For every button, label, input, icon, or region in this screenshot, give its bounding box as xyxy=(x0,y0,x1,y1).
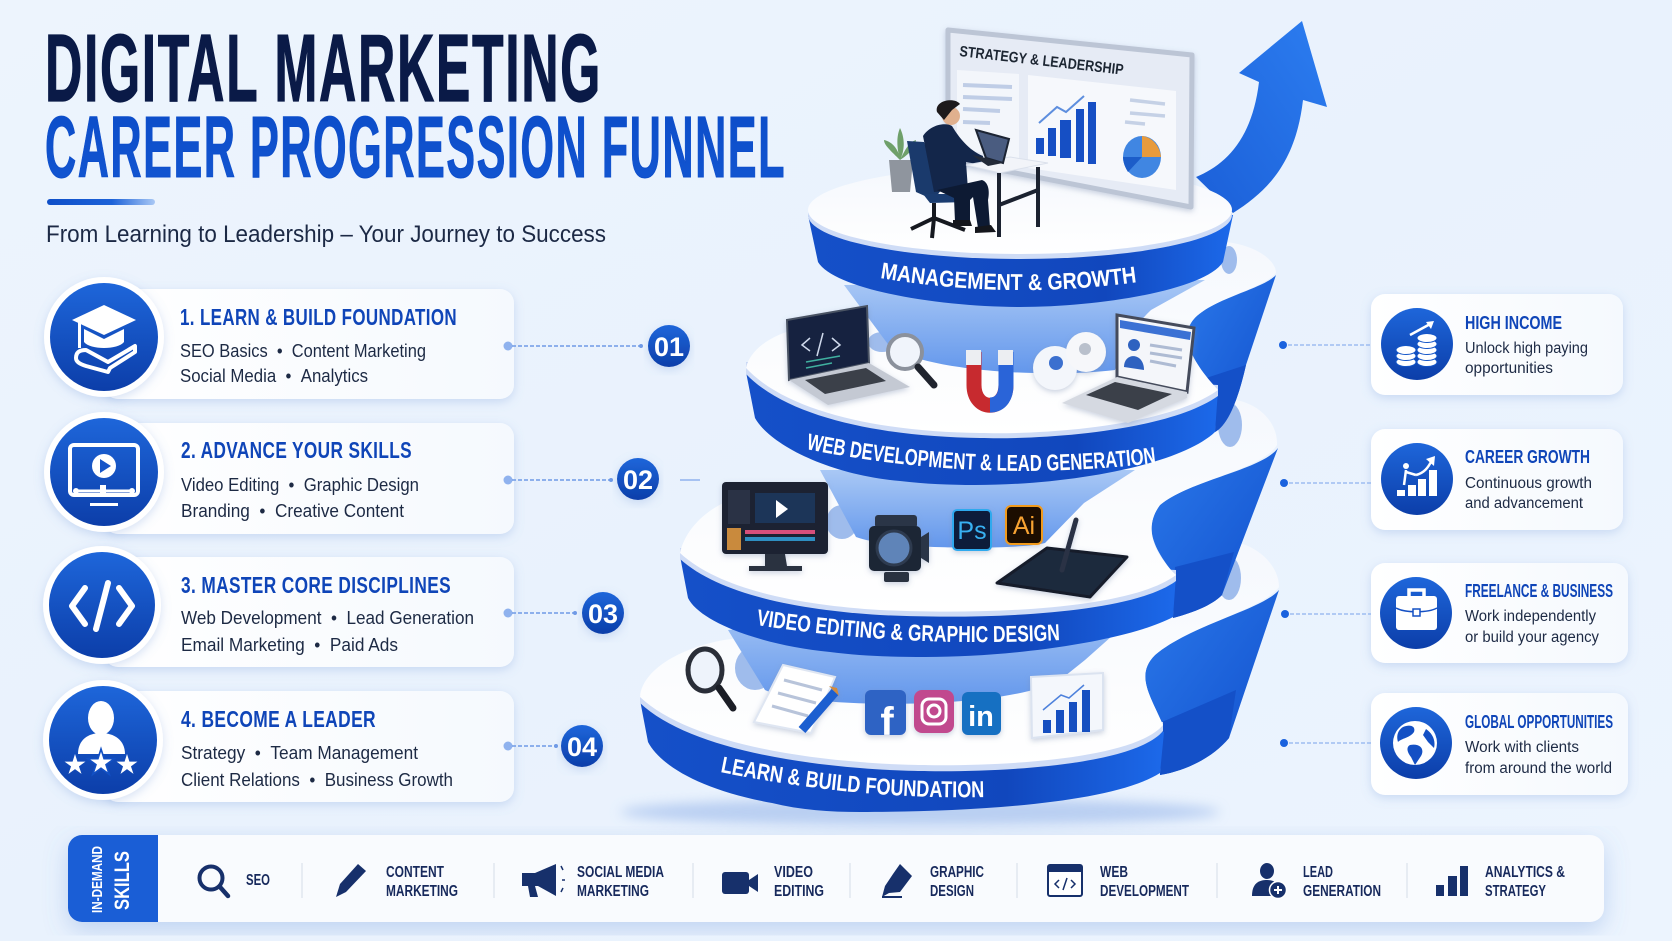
arrow: connector high income xyxy=(1279,341,1371,349)
strategy dashboard screen xyxy=(948,30,1192,207)
title xyxy=(45,15,786,196)
step heading: 2. ADVANCE YOUR SKILLS xyxy=(181,437,412,463)
skill: web development xyxy=(1048,864,1189,900)
arrow: connector freelance xyxy=(1281,610,1371,618)
funnel cone 2 xyxy=(820,470,1135,548)
panel: step 3 xyxy=(43,546,514,667)
skill: social media marketing xyxy=(522,864,664,900)
tier 4 objects xyxy=(688,649,1103,744)
badge 01 xyxy=(648,325,690,367)
skill: video editing: EDITING xyxy=(774,883,824,900)
icon: potted plant xyxy=(884,128,916,192)
icon: camera xyxy=(869,515,929,582)
step heading: 4. BECOME A LEADER xyxy=(181,706,376,732)
panel: career growth xyxy=(1371,429,1623,530)
card text xyxy=(1465,340,1588,377)
icon: photoshop xyxy=(953,510,991,550)
skill: graphic design xyxy=(882,864,984,900)
bar chart xyxy=(1036,102,1096,164)
icon: briefcase xyxy=(1380,577,1452,649)
card text: Work with clients xyxy=(1465,739,1579,756)
panel: step 2 xyxy=(44,412,514,534)
step skills: Email Marketing • Paid Ads xyxy=(181,635,398,655)
skill: content marketing: CONTENT xyxy=(386,864,444,881)
screen heading: STRATEGY & LEADERSHIP xyxy=(959,43,1124,79)
arrow: connector to badge 01 xyxy=(504,342,643,350)
step skills: Client Relations • Business Growth xyxy=(181,770,453,790)
arrow: connector career growth xyxy=(1280,479,1371,487)
step skills xyxy=(181,608,474,655)
skill: analytics and strategy: ANALYTICS & xyxy=(1485,864,1565,881)
panel: in-demand skills bar xyxy=(68,835,1604,922)
icon: code laptop xyxy=(787,306,910,405)
skill: graphic design: DESIGN xyxy=(930,883,974,900)
card text: Unlock high paying xyxy=(1465,340,1588,357)
skill: video editing xyxy=(722,864,824,900)
tier label: VIDEO EDITING & GRAPHIC DESIGN xyxy=(758,609,1059,642)
funnel cone 1 xyxy=(844,280,1205,373)
card text: and advancement xyxy=(1465,495,1584,512)
funnel tier 2: web development and lead generation xyxy=(746,242,1276,485)
icon: video editing monitor xyxy=(722,482,828,571)
icon: illustrator xyxy=(1006,506,1042,544)
badge 03: 03 xyxy=(588,599,618,629)
card text: from around the world xyxy=(1465,760,1612,777)
card text: Continuous growth xyxy=(1465,475,1592,492)
step skills: SEO Basics • Content Marketing xyxy=(180,341,426,361)
step skills xyxy=(180,341,426,386)
panel: step 1 xyxy=(44,277,514,399)
icon: office chair xyxy=(907,141,973,238)
step skills: Strategy • Team Management xyxy=(181,743,418,763)
skill: seo xyxy=(200,866,270,896)
icon: code brackets xyxy=(43,546,161,664)
step heading: 1. LEARN & BUILD FOUNDATION xyxy=(180,304,457,330)
icon: facebook xyxy=(865,690,906,744)
tier 1 objects xyxy=(884,30,1192,238)
icon: magnifier xyxy=(888,335,934,385)
person at desk xyxy=(923,100,996,233)
card text xyxy=(1465,739,1612,777)
title: DIGITAL MARKETING xyxy=(45,15,602,122)
skill: social media marketing: MARKETING xyxy=(577,883,649,900)
step skills: Web Development • Lead Generation xyxy=(181,608,474,628)
card text: opportunities xyxy=(1465,360,1553,377)
icon: magnet xyxy=(966,350,1013,405)
title underline xyxy=(47,199,155,205)
skill: web development: WEB xyxy=(1100,864,1128,881)
panel: freelance and business xyxy=(1371,563,1628,663)
icon: facebook: f xyxy=(880,700,894,744)
desk and laptop xyxy=(966,130,1048,237)
icon: globe xyxy=(1380,707,1452,779)
skill: analytics and strategy xyxy=(1436,864,1565,900)
icon: video monitor xyxy=(44,412,164,532)
icon: profile laptop xyxy=(1062,315,1194,423)
badge 04: 04 xyxy=(567,732,597,762)
skills tag: IN-DEMAND xyxy=(89,846,106,913)
icon: coins xyxy=(1381,308,1453,380)
skill: lead generation xyxy=(1252,863,1381,900)
step heading: 3. MASTER CORE DISCIPLINES xyxy=(181,572,451,598)
step skills xyxy=(181,743,453,790)
icon: magnifier xyxy=(688,649,733,708)
icon: graduation cap and book xyxy=(44,277,164,397)
text: CAREER PROGRESSION FUNNEL xyxy=(45,99,786,196)
pie chart xyxy=(1123,136,1161,178)
card heading: CAREER GROWTH xyxy=(1465,446,1590,467)
tier label: LEARN & BUILD FOUNDATION xyxy=(721,756,984,798)
badge 03 xyxy=(582,592,624,634)
arrow: connector global xyxy=(1280,739,1371,747)
icon: gears xyxy=(1033,332,1106,390)
tier label: MANAGEMENT & GROWTH xyxy=(881,262,1136,290)
step skills: Branding • Creative Content xyxy=(181,501,404,521)
badge 04 xyxy=(561,725,603,767)
panel: global opportunities xyxy=(1371,693,1628,795)
icon: graphics tablet xyxy=(997,520,1127,597)
card text xyxy=(1465,608,1599,646)
step skills: Social Media • Analytics xyxy=(180,366,368,386)
skill: lead generation: LEAD xyxy=(1303,864,1333,881)
skill: graphic design: GRAPHIC xyxy=(930,864,984,881)
badge 02 xyxy=(617,458,659,500)
badge 02: 02 xyxy=(623,465,653,495)
funnel tier 1: management and growth xyxy=(808,168,1233,307)
tier 2 objects xyxy=(787,306,1194,423)
funnel cone 3 xyxy=(728,600,1130,704)
icon: steps and arrow xyxy=(1381,443,1453,515)
skill: content marketing: MARKETING xyxy=(386,883,458,900)
funnel tier 3: video editing and graphic design xyxy=(680,400,1278,657)
skill: social media marketing: SOCIAL MEDIA xyxy=(577,864,664,881)
subtitle: From Learning to Leadership – Your Journey to Success xyxy=(46,221,606,248)
card heading: HIGH INCOME xyxy=(1465,312,1562,333)
skill: content marketing xyxy=(336,864,458,900)
tier label: WEB DEVELOPMENT & LEAD GENERATION xyxy=(808,434,1155,471)
step skills: Video Editing • Graphic Design xyxy=(181,475,419,495)
step skills xyxy=(181,475,419,521)
skill: lead generation: GENERATION xyxy=(1303,883,1381,900)
arrow: connector to badge 03 xyxy=(504,608,577,618)
arrow: connector to badge 04 xyxy=(504,742,558,750)
tier 3 objects xyxy=(722,482,1127,597)
skill: seo: SEO xyxy=(246,872,270,889)
skill: video editing: VIDEO xyxy=(774,864,813,881)
card text: Work independently xyxy=(1465,608,1596,625)
arrow: upward growth xyxy=(1196,21,1327,213)
skills tag xyxy=(68,835,158,922)
card text xyxy=(1465,475,1592,512)
skill: web development: DEVELOPMENT xyxy=(1100,883,1189,900)
skills tag: SKILLS xyxy=(111,851,134,910)
icon: photoshop: Ps xyxy=(957,517,987,545)
arrow: connector to badge 02 xyxy=(504,476,700,484)
icon: illustrator: Ai xyxy=(1013,512,1035,540)
icon: document and pencil xyxy=(754,665,839,733)
panel: step 4 xyxy=(43,680,514,802)
icon: linkedin xyxy=(962,692,1001,735)
icon: leader with stars xyxy=(43,680,163,800)
icon: growth chart tile xyxy=(1031,673,1103,738)
icon: instagram xyxy=(914,690,954,733)
icon: linkedin: in xyxy=(968,701,994,733)
card text: or build your agency xyxy=(1465,629,1599,646)
funnel tier 4: learn and build foundation xyxy=(621,544,1279,832)
skill: analytics and strategy: STRATEGY xyxy=(1485,883,1546,900)
panel: high income xyxy=(1371,294,1623,395)
badge 01: 01 xyxy=(654,332,684,362)
